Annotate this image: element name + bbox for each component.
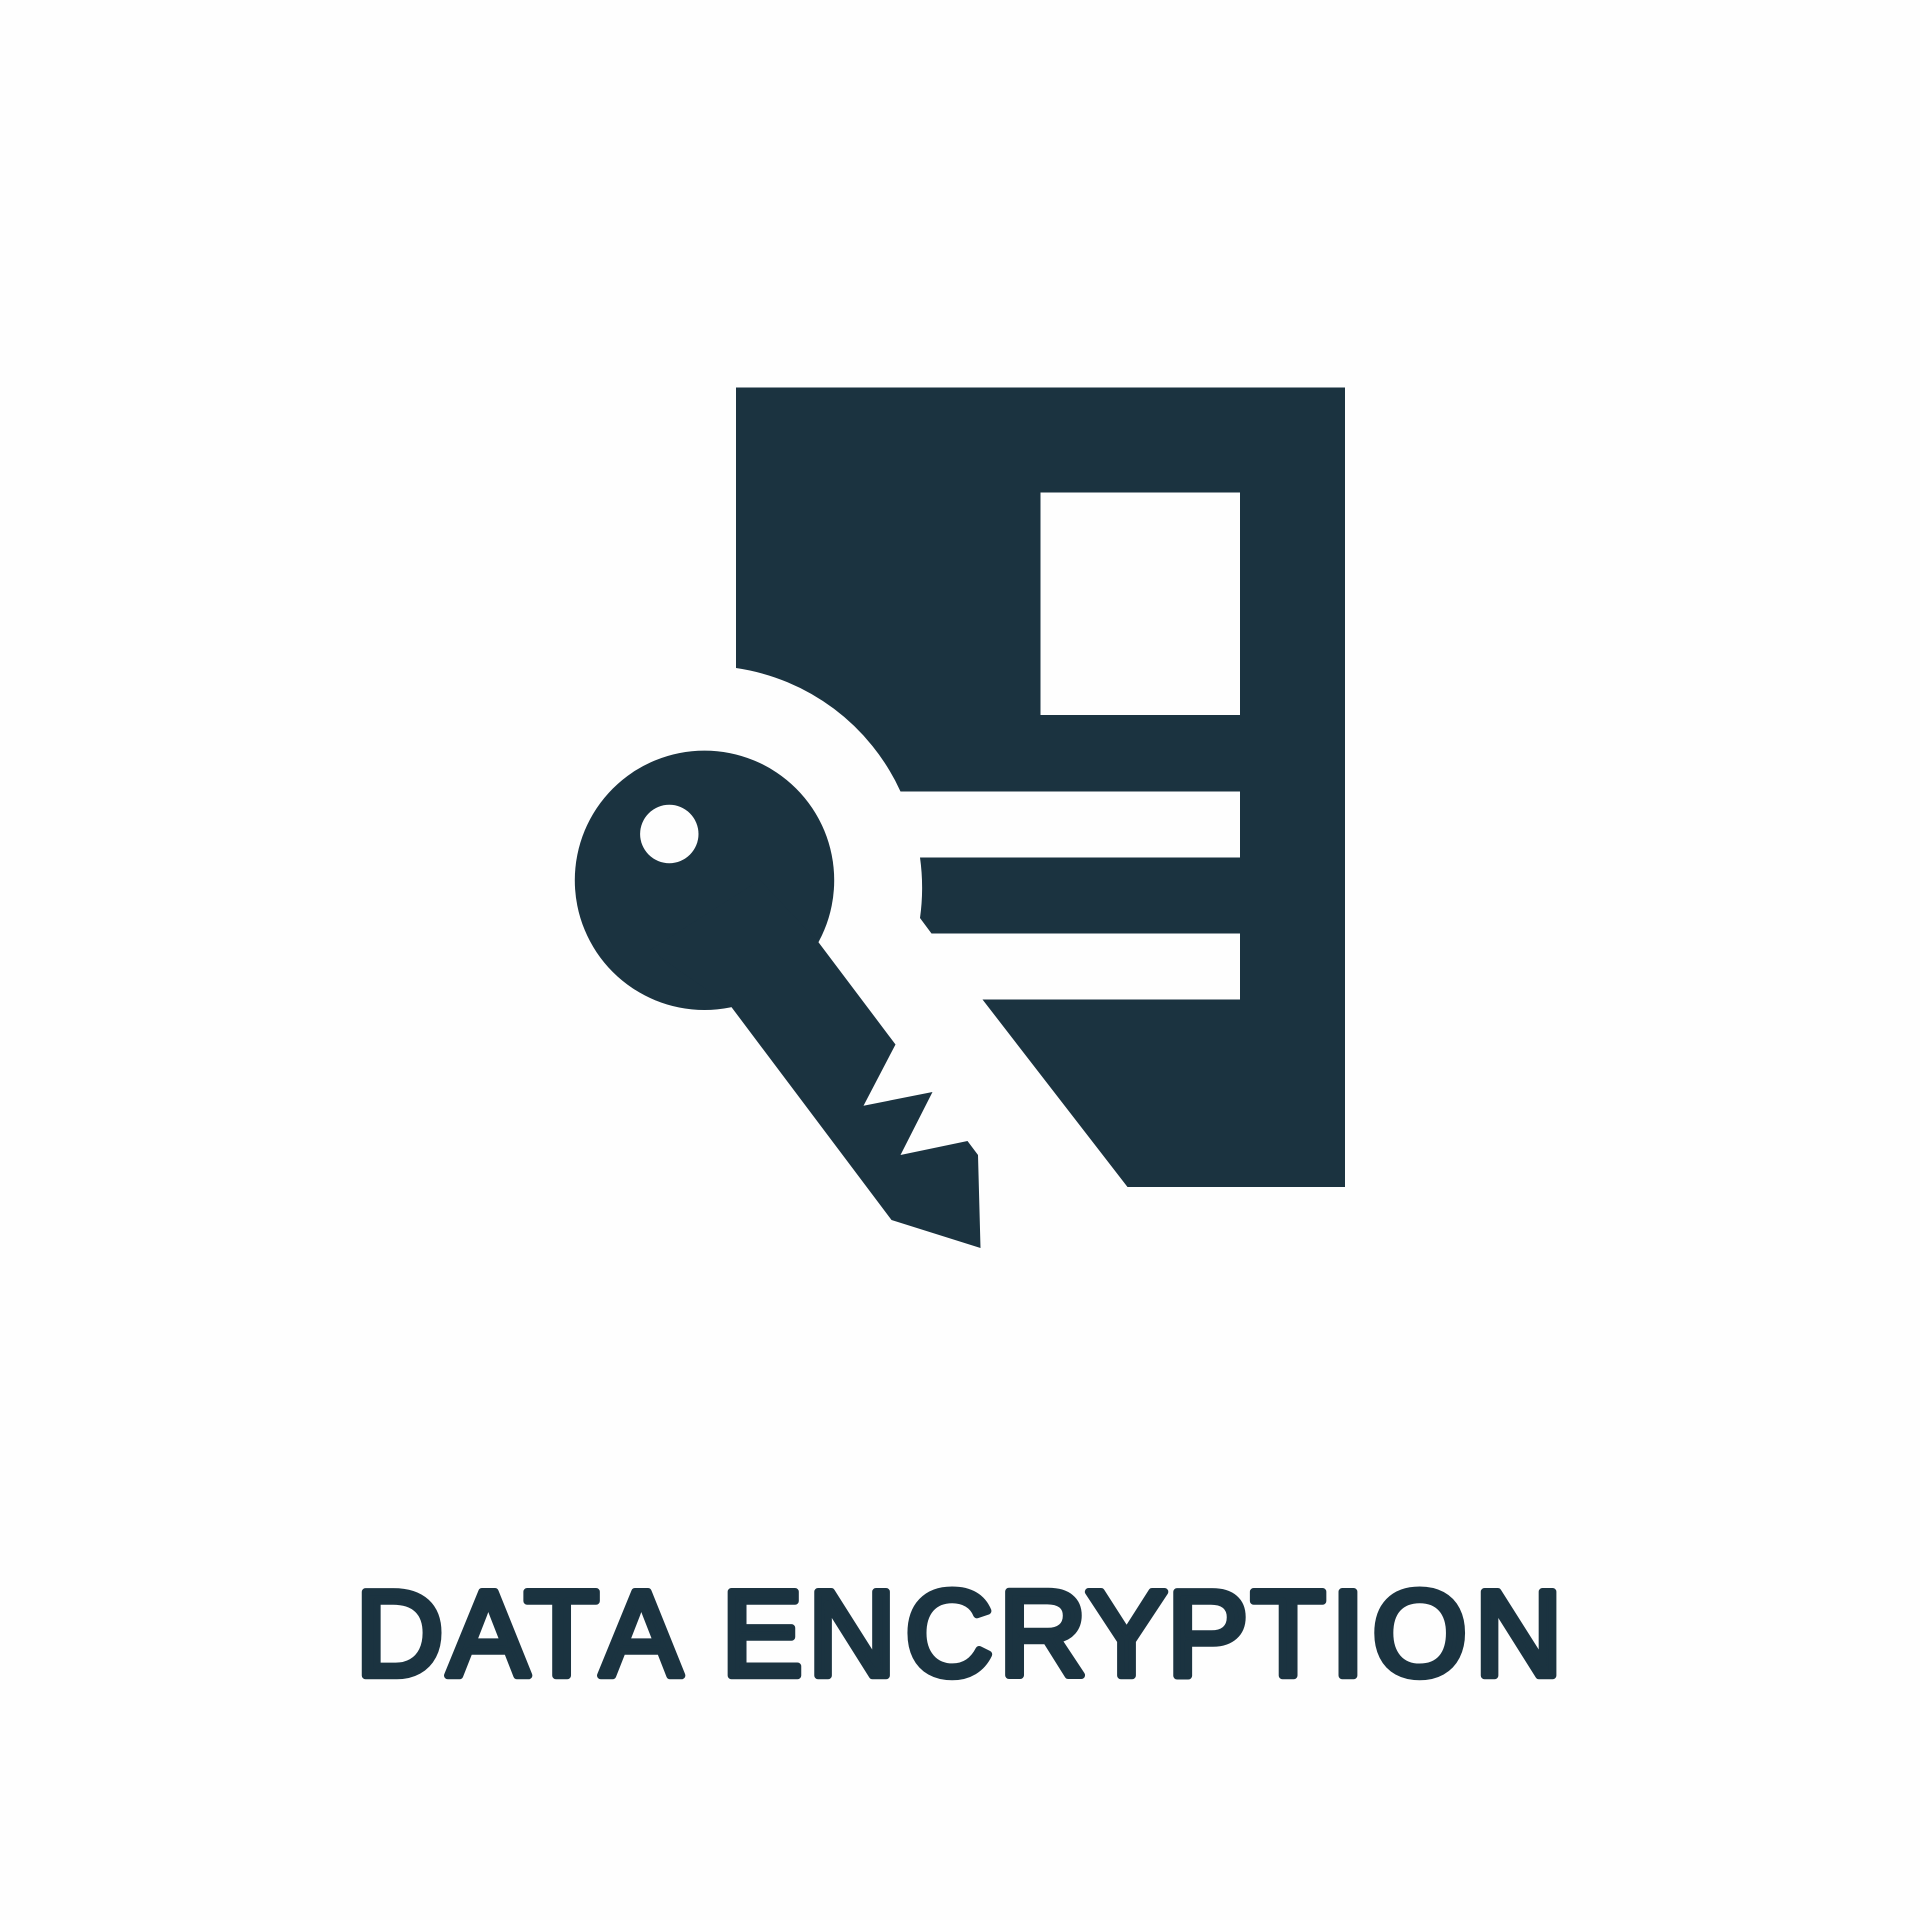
icon: key	[575, 751, 980, 1248]
icon: data encryption	[575, 388, 1345, 1248]
title: DATAENCRYPTION	[356, 1566, 1563, 1702]
document with window and text lines	[736, 388, 1345, 1187]
